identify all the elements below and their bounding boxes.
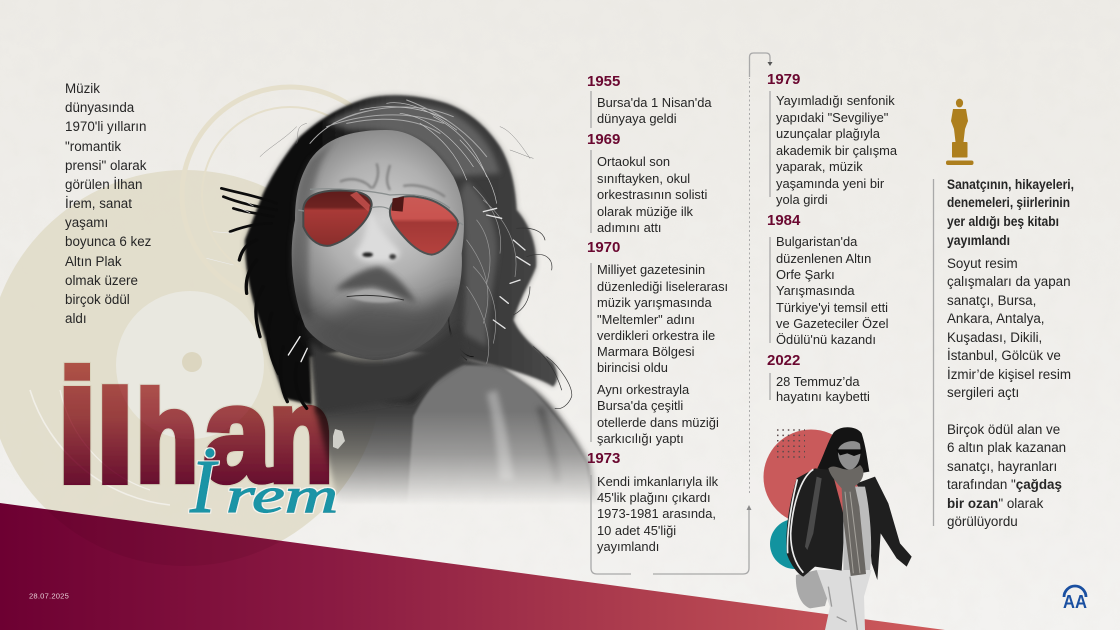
closing paragraph: bir ozan" olarak: [947, 496, 1044, 511]
1969: orkestrasının solisti: [597, 187, 707, 202]
1984: düzenlenen Altın: [776, 251, 871, 266]
1984: ve Gazeteciler Özel: [776, 316, 888, 331]
1984: Yarışmasında: [776, 283, 855, 298]
bold lead: yayımlandı: [947, 233, 1010, 248]
1970: otellerde dans müziği: [597, 415, 719, 430]
title: İlhan: a: [203, 360, 272, 510]
2022: 28 Temmuz’da: [776, 374, 860, 389]
1969: adımını attı: [597, 220, 662, 235]
jacket stripes: [788, 469, 813, 573]
intro text: İrem, sanat: [65, 196, 132, 211]
closing paragraph: tarafından "çağdaş: [947, 477, 1062, 492]
side text: [934, 177, 1074, 529]
title: İlhan: [56, 358, 333, 513]
1969: 1969: [587, 131, 620, 148]
1984: Bulgaristan'da: [776, 234, 858, 249]
title: İrem script: rem: [226, 467, 338, 523]
intro text: yaşamı: [65, 215, 108, 230]
1984: Orfe Şarkı: [776, 267, 835, 282]
hair strands, left: [221, 188, 307, 408]
exhibitions paragraph: İzmir’de kişisel resim: [947, 367, 1071, 382]
shirt: [843, 487, 871, 570]
circle decorations behind the small figure: [764, 430, 858, 569]
1970: düzenlediği liselerarası: [597, 279, 728, 294]
1973: 1973-1981 arasında,: [597, 506, 716, 521]
1970: müzik yarışmasında: [597, 295, 712, 310]
1969: [587, 131, 707, 235]
date: 28.07.2025: [29, 592, 69, 600]
title: İlhan: İ: [56, 359, 98, 513]
title: İlhan: h: [136, 365, 198, 509]
exhibitions paragraph: sanatçı, Bursa,: [947, 293, 1036, 308]
portrait photo of İlhan İrem: [207, 95, 600, 513]
exhibitions paragraph: Soyut resim: [947, 256, 1018, 271]
closing paragraph: sanatçı, hayranları: [947, 459, 1057, 474]
title: İlhan: l: [94, 362, 136, 512]
timeline connector: [591, 53, 772, 574]
intro text: görülen İlhan: [65, 177, 142, 192]
exhibitions paragraph: sergileri açtı: [947, 385, 1019, 400]
1970: Marmara Bölgesi: [597, 344, 694, 359]
1955: 1955: [587, 73, 620, 90]
1984: Türkiye'yi temsil etti: [776, 300, 888, 315]
closing paragraph: Birçok ödül alan ve: [947, 422, 1060, 437]
decorative vinyl rings: [0, 87, 398, 566]
1970: şarkıcılığı yaptı: [597, 431, 684, 446]
1979: uzunçalar plağıyla: [776, 126, 881, 141]
exhibitions paragraph: [947, 256, 1071, 400]
intro text: boyunca 6 kez: [65, 234, 152, 249]
shirt and chest: [310, 356, 598, 502]
intro text: Altın Plak: [65, 254, 122, 269]
1970: "Meltemler" adını: [597, 312, 695, 327]
title: İrem script: İ: [189, 445, 219, 529]
icon: golden statuette: [946, 99, 974, 165]
intro text: 1970'li yılların: [65, 119, 146, 134]
bold lead: [947, 177, 1074, 248]
1979: yola girdi: [776, 192, 828, 207]
2022: 2022: [767, 352, 800, 369]
earring: [333, 429, 345, 449]
1984: 1984: [767, 212, 801, 229]
1955: [587, 73, 712, 128]
1979: akademik bir çalışma: [776, 143, 898, 158]
face: [291, 130, 467, 413]
intro text: birçok ödül: [65, 292, 130, 307]
hair: [207, 95, 572, 409]
1970: 1970: [587, 239, 620, 256]
red aviator sunglasses: [298, 189, 463, 255]
1970: Bursa'da çeşitli: [597, 398, 683, 413]
face and sunglasses: [836, 441, 862, 470]
exhibitions paragraph: İstanbul, Gölcük ve: [947, 348, 1061, 363]
1955: dünyaya geldi: [597, 111, 677, 126]
1973: 1973: [587, 450, 620, 467]
intro text: aldı: [65, 311, 87, 326]
1970: verdikleri orkestra ile: [597, 328, 715, 343]
1970: Aynı orkestrayla: [597, 382, 690, 397]
exhibitions paragraph: Ankara, Antalya,: [947, 311, 1045, 326]
1973: [587, 450, 719, 554]
exhibitions paragraph: Kuşadası, Dikili,: [947, 330, 1042, 345]
1973: 10 adet 45'liği: [597, 523, 676, 538]
bold lead: Sanatçının, hikayeleri,: [947, 177, 1074, 192]
1973: yayımlandı: [597, 539, 659, 554]
1979: 1979: [767, 71, 800, 88]
bottom maroon band: [0, 503, 945, 630]
intro text: Müzik: [65, 81, 100, 96]
walking figure photo: [786, 427, 912, 630]
intro text: prensi" olarak: [65, 158, 147, 173]
closing paragraph: [947, 422, 1066, 529]
intro text: "romantik: [65, 139, 121, 154]
1979: yaşamında yeni bir: [776, 176, 885, 191]
1979: [767, 71, 898, 207]
bold lead: yer aldığı beş kitabı: [947, 214, 1059, 229]
closing paragraph: 6 altın plak kazanan: [947, 440, 1066, 455]
1979: Yayımladığı senfonik: [776, 93, 895, 108]
1973: 45'lik plağını çıkardı: [597, 490, 711, 505]
1955: Bursa'da 1 Nisan'da: [597, 95, 712, 110]
1979: yaparak, müzik: [776, 159, 863, 174]
1984: Ödülü'nü kazandı: [776, 332, 876, 347]
1970: Milliyet gazetesinin: [597, 262, 705, 277]
2022: hayatını kaybetti: [776, 389, 870, 404]
icon: AA logo: AA: [1063, 592, 1087, 612]
scarf: [828, 465, 866, 576]
timeline column 1: [587, 73, 728, 554]
1969: sınıftayken, okul: [597, 171, 690, 186]
black jacket: [786, 468, 912, 580]
bold lead: denemeleri, şiirlerinin: [947, 195, 1070, 210]
1969: olarak müziğe ilk: [597, 204, 694, 219]
1979: yapıdaki "Sevgiliye": [776, 110, 889, 125]
strap: [805, 477, 822, 550]
timeline column 2: [767, 71, 898, 404]
intro text: dünyasında: [65, 100, 135, 115]
title: İrem script: [189, 445, 338, 529]
title: İlhan: n: [269, 358, 333, 510]
closing paragraph: görülüyordu: [947, 514, 1018, 529]
1970: birincisi oldu: [597, 360, 668, 375]
intro text: olmak üzere: [65, 273, 138, 288]
1973: Kendi imkanlarıyla ilk: [597, 474, 719, 489]
exhibitions paragraph: çalışmaları da yapan: [947, 274, 1071, 289]
1969: Ortaokul son: [597, 154, 670, 169]
1970: [587, 239, 728, 446]
intro text: [65, 81, 152, 326]
2022: [767, 352, 870, 404]
hair: [817, 427, 869, 477]
trousers and bag: [796, 570, 872, 630]
1984: [767, 212, 888, 347]
